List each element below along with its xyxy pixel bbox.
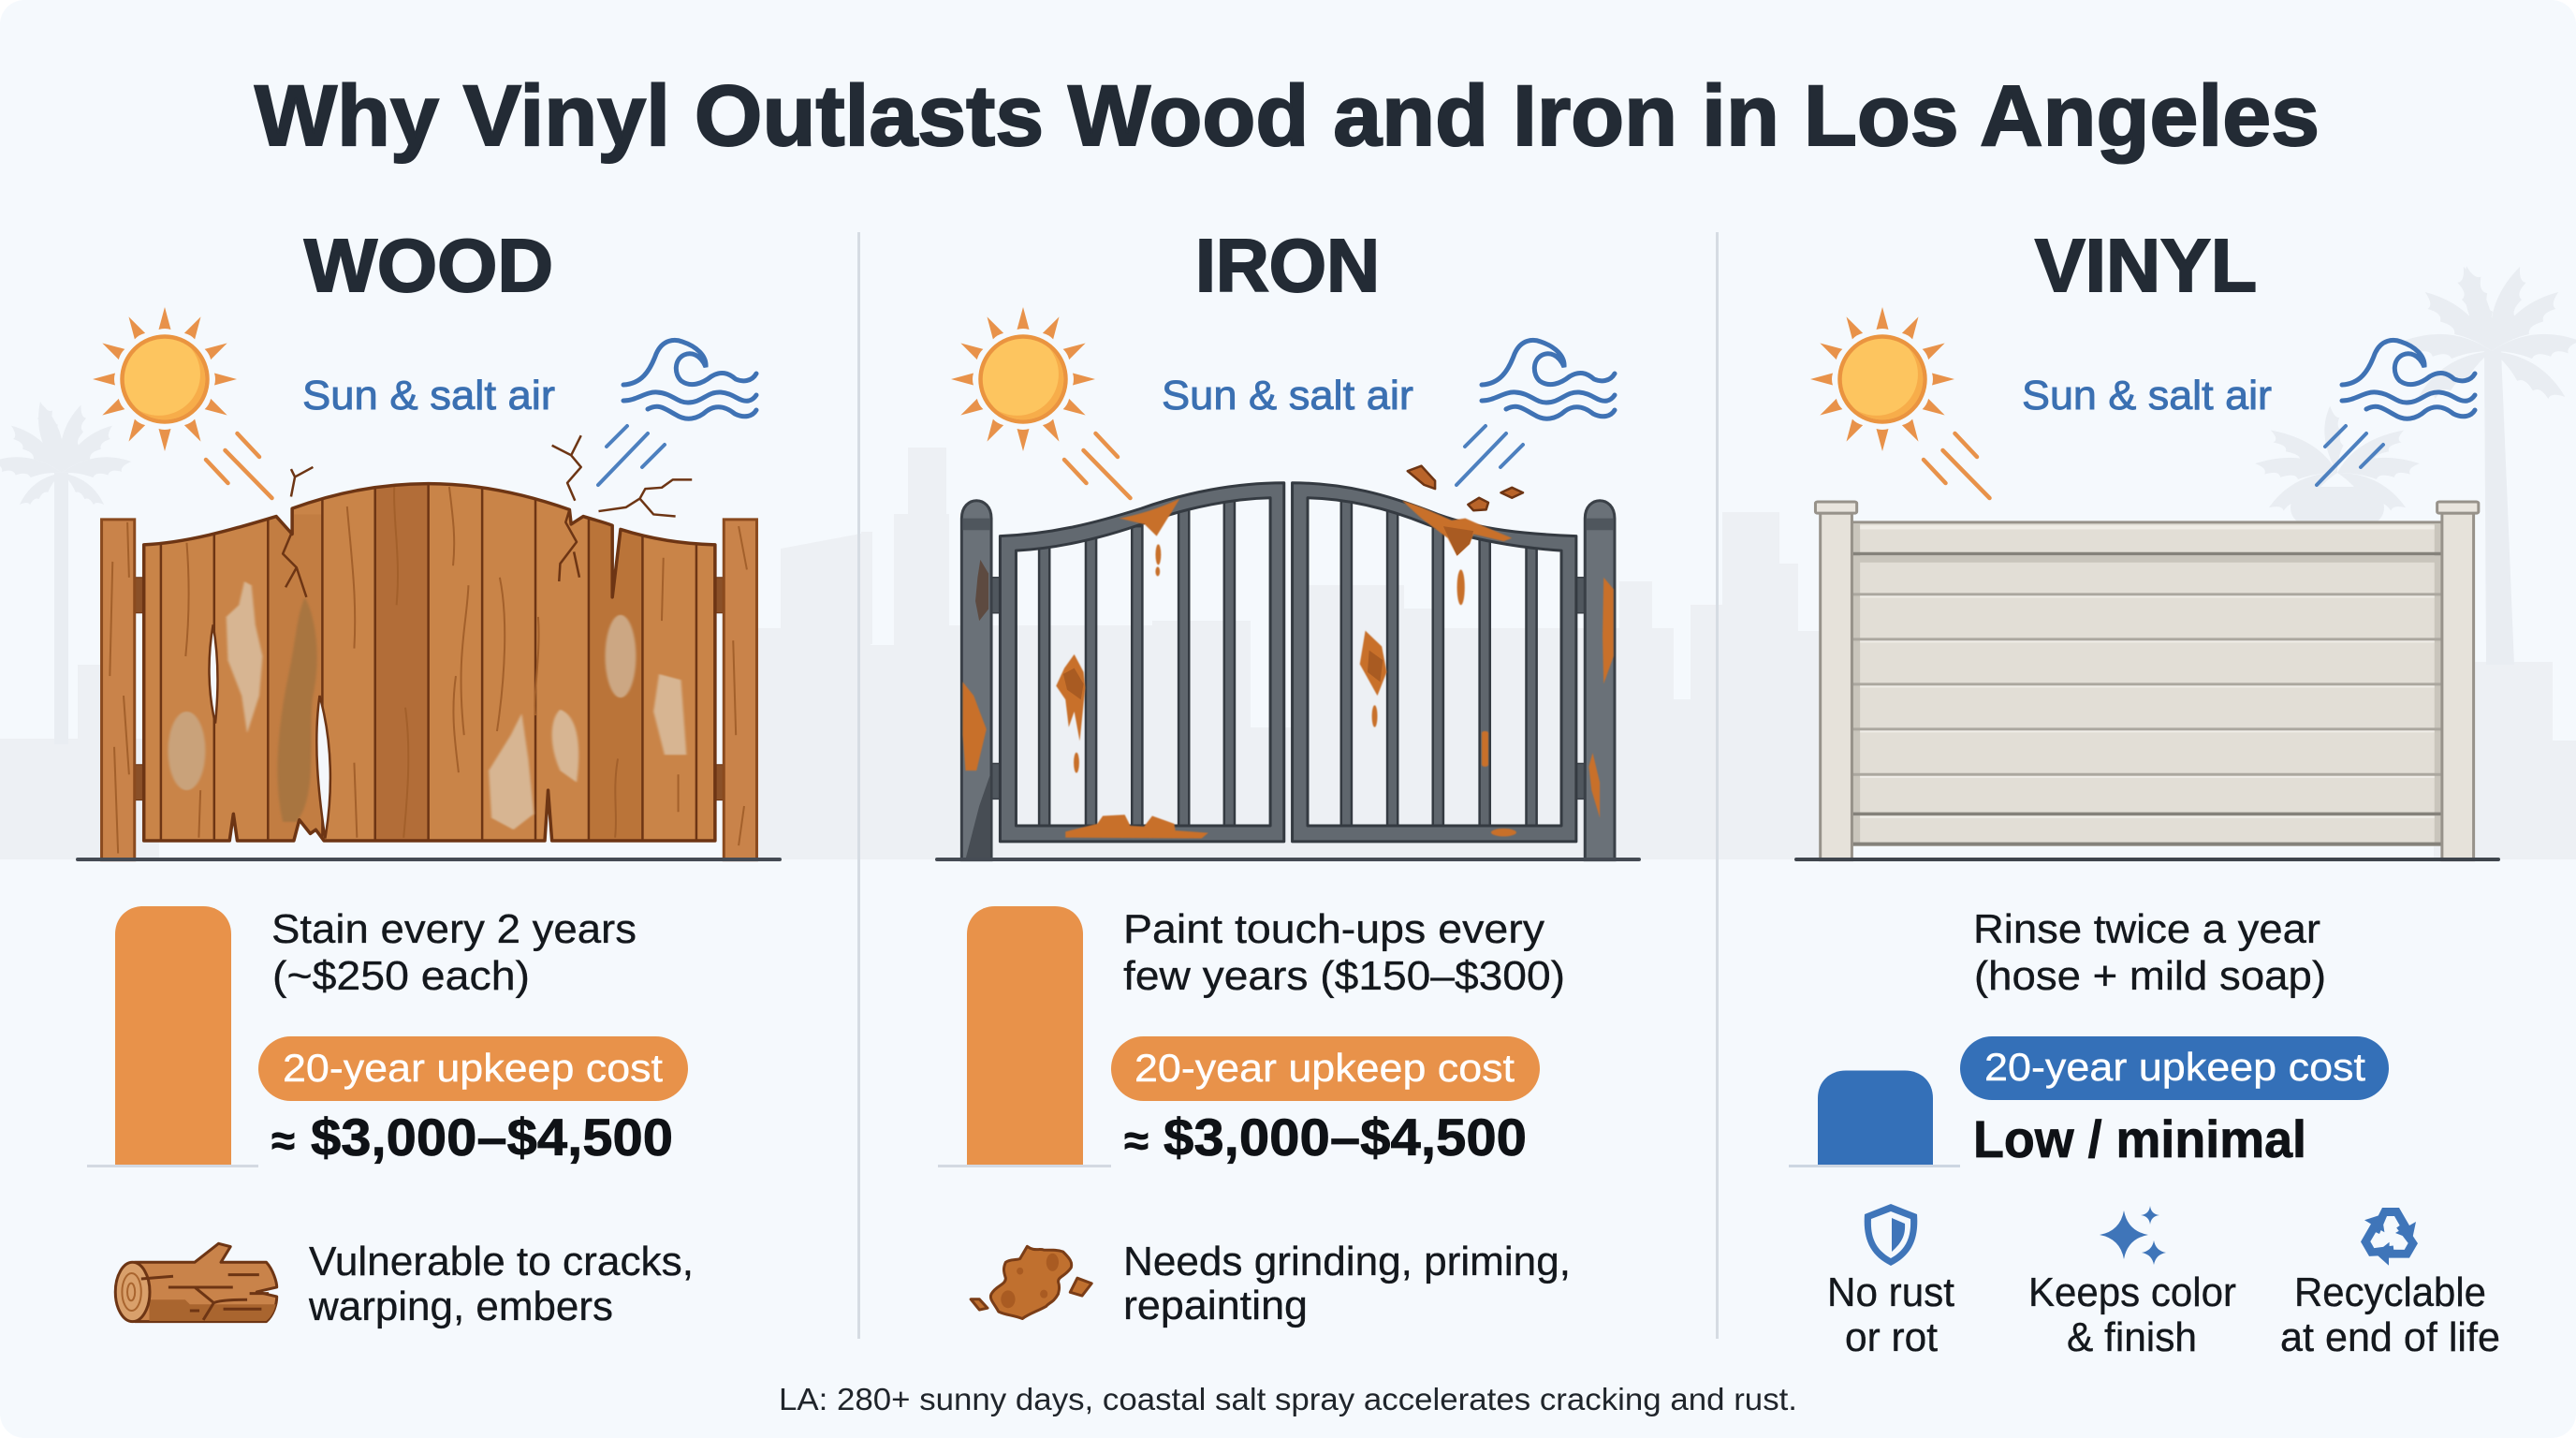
iron gate illustration — [961, 466, 1615, 860]
rust flakes — [1408, 466, 1523, 510]
iron weakness text: repainting — [1123, 1283, 1308, 1328]
iron posts — [961, 501, 1615, 860]
vinyl upkeep text: (hose + mild soap) — [1974, 953, 2326, 999]
iron weakness text: Needs grinding, priming, — [1123, 1239, 1571, 1284]
vinyl benefit: no rust — [1827, 1269, 1954, 1360]
vinyl upkeep text: Rinse twice a year — [1973, 906, 2320, 952]
ground line vinyl — [1794, 858, 2500, 861]
vinyl benefit: recyclable: at end of life — [2280, 1314, 2500, 1360]
vinyl panel shading — [1853, 524, 2441, 844]
icon: shield — [1865, 1204, 1917, 1266]
plank lines — [1853, 594, 2441, 774]
sun rays vinyl — [1924, 433, 1990, 498]
wood panel — [144, 484, 715, 841]
rust patches — [963, 499, 1614, 839]
dark rust and rust shade — [1063, 526, 1473, 699]
icon: recycle — [2352, 1208, 2423, 1272]
icon: waves vinyl — [2342, 340, 2475, 418]
plank shading and lines — [161, 475, 696, 845]
weathered patches — [168, 581, 686, 829]
wood cost bar — [87, 906, 258, 1167]
background: LA skyline silhouettes — [0, 266, 2576, 859]
background palm left — [0, 402, 131, 744]
column dividers — [857, 232, 1719, 1339]
vinyl benefit: recyclable: Recyclable — [2294, 1269, 2486, 1315]
vinyl benefit: keeps color: Keeps color — [2028, 1269, 2236, 1315]
sun rays wood — [206, 433, 271, 498]
salt spray vinyl — [2317, 426, 2383, 485]
wood posts — [102, 520, 756, 860]
vinyl cost bar — [1789, 1071, 1960, 1167]
vinyl fence illustration — [1815, 502, 2479, 860]
salt spray iron — [1456, 426, 1523, 485]
wood cost value: ≈ — [271, 1116, 295, 1165]
wood upkeep text — [271, 906, 637, 999]
vinyl upkeep text — [1973, 906, 2326, 999]
column heading: vinyl: VINYL — [2035, 224, 2257, 307]
icon: sun vinyl — [1810, 307, 1954, 451]
wood panel outline — [144, 484, 715, 841]
wood warp gaps — [209, 624, 330, 839]
vinyl cost pill — [1960, 1036, 2389, 1100]
title: Why Vinyl Outlasts Wood and Iron in Los Angeles — [255, 68, 2320, 164]
wood cracks — [283, 435, 692, 597]
salt spray wood — [598, 426, 665, 485]
vinyl benefit: no rust: No rust — [1827, 1269, 1954, 1315]
wood upkeep text: (~$250 each) — [272, 953, 530, 999]
wood hinges — [135, 578, 724, 800]
ground line wood — [76, 858, 782, 861]
wood cost pill: 20-year upkeep cost — [283, 1046, 663, 1090]
wood grain — [110, 487, 747, 854]
wood weakness text — [308, 1239, 694, 1329]
wood upkeep text: Stain every 2 years — [271, 906, 637, 952]
label: sun and salt air vinyl: Sun & salt air — [2022, 373, 2272, 418]
column heading: iron: IRON — [1195, 224, 1380, 307]
vinyl benefit: keeps color — [2028, 1269, 2236, 1360]
top rail highlight — [1860, 525, 2435, 529]
wood weakness text: warping, embers — [308, 1284, 613, 1329]
icon: sun wood — [93, 307, 237, 451]
footer note: LA: 280+ sunny days, coastal salt spray accelerates cracking and rust. — [779, 1382, 1797, 1416]
worn patch on left post — [975, 560, 988, 621]
vinyl cost value: Low / minimal — [1973, 1109, 2306, 1168]
worn base of left post — [965, 774, 990, 859]
icon: waves wood — [623, 340, 756, 418]
iron cost bar — [938, 906, 1111, 1167]
vinyl cost pill: 20-year upkeep cost — [1984, 1045, 2365, 1089]
ground line iron — [935, 858, 1641, 861]
iron bars — [1039, 499, 1537, 828]
post cap bands — [963, 519, 1614, 530]
background palm small — [2255, 406, 2420, 529]
plank highlights — [1860, 596, 2435, 817]
column heading: wood: WOOD — [304, 224, 553, 307]
vinyl benefit: keeps color: & finish — [2067, 1314, 2197, 1360]
iron upkeep text: few years ($150–$300) — [1123, 953, 1565, 999]
icon: cracked log — [115, 1243, 277, 1322]
icon: sparkles — [2100, 1206, 2166, 1265]
label: sun and salt air wood: Sun & salt air — [302, 373, 555, 418]
iron cost value: $3,000–$4,500 — [1164, 1108, 1527, 1167]
wood weakness text: Vulnerable to cracks, — [309, 1239, 694, 1284]
vinyl benefit: no rust: or rot — [1845, 1314, 1938, 1360]
wood cost value: $3,000–$4,500 — [311, 1108, 673, 1167]
sun rays iron — [1064, 433, 1131, 498]
label: sun and salt air iron: Sun & salt air — [1162, 373, 1413, 418]
iron cost pill: 20-year upkeep cost — [1134, 1046, 1515, 1090]
iron cost pill — [1111, 1036, 1540, 1101]
iron gate frames — [1000, 483, 1576, 842]
wood fence illustration — [102, 435, 756, 860]
icon: rust flake — [971, 1246, 1091, 1318]
icon: waves iron — [1482, 340, 1615, 418]
iron upkeep text: Paint touch-ups every — [1123, 906, 1544, 952]
vinyl benefit: recyclable — [2280, 1269, 2500, 1360]
iron hinges — [991, 578, 1586, 799]
wood cost pill — [258, 1036, 688, 1101]
iron weakness text — [1123, 1239, 1571, 1328]
background palm right — [2404, 266, 2576, 665]
iron cost value: ≈ — [1124, 1116, 1149, 1165]
icon: sun iron — [951, 307, 1095, 451]
rail lines — [1853, 554, 2441, 844]
vinyl post caps — [1815, 502, 2479, 513]
vinyl posts — [1821, 513, 2474, 860]
vinyl panel — [1852, 522, 2442, 844]
iron upkeep text — [1123, 906, 1565, 999]
